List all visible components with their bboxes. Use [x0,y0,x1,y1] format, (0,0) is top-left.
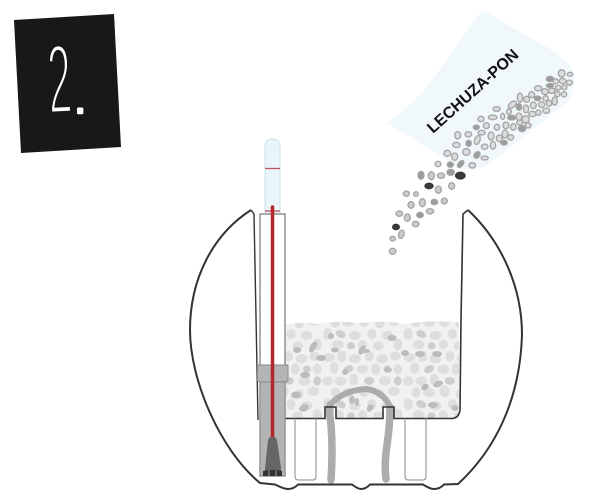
collar [258,365,288,382]
pebbles inside bag [435,70,573,168]
indicator glass tube [265,139,280,214]
gravel layer in planter [285,318,461,420]
number card [14,14,121,153]
float [265,437,281,476]
outer shell [190,210,522,489]
red rod [271,207,274,438]
pebbles pouring from bag [389,70,573,254]
inner right wall and base [285,210,468,418]
bag label: LECHUZA-PON [424,46,522,137]
falling pebbles [389,172,455,254]
indicator shaft [260,214,285,476]
step number: 2 [45,24,74,134]
water level indicator [258,139,288,476]
seed bag [387,10,575,170]
bag body [387,10,575,170]
step number: . [75,78,86,122]
reservoir legs [295,418,426,480]
darker pebbles inside bag [447,76,554,175]
wick [330,389,390,480]
shaft lower fill [260,382,285,476]
inner left wall [251,210,258,420]
planter outline [190,210,522,489]
